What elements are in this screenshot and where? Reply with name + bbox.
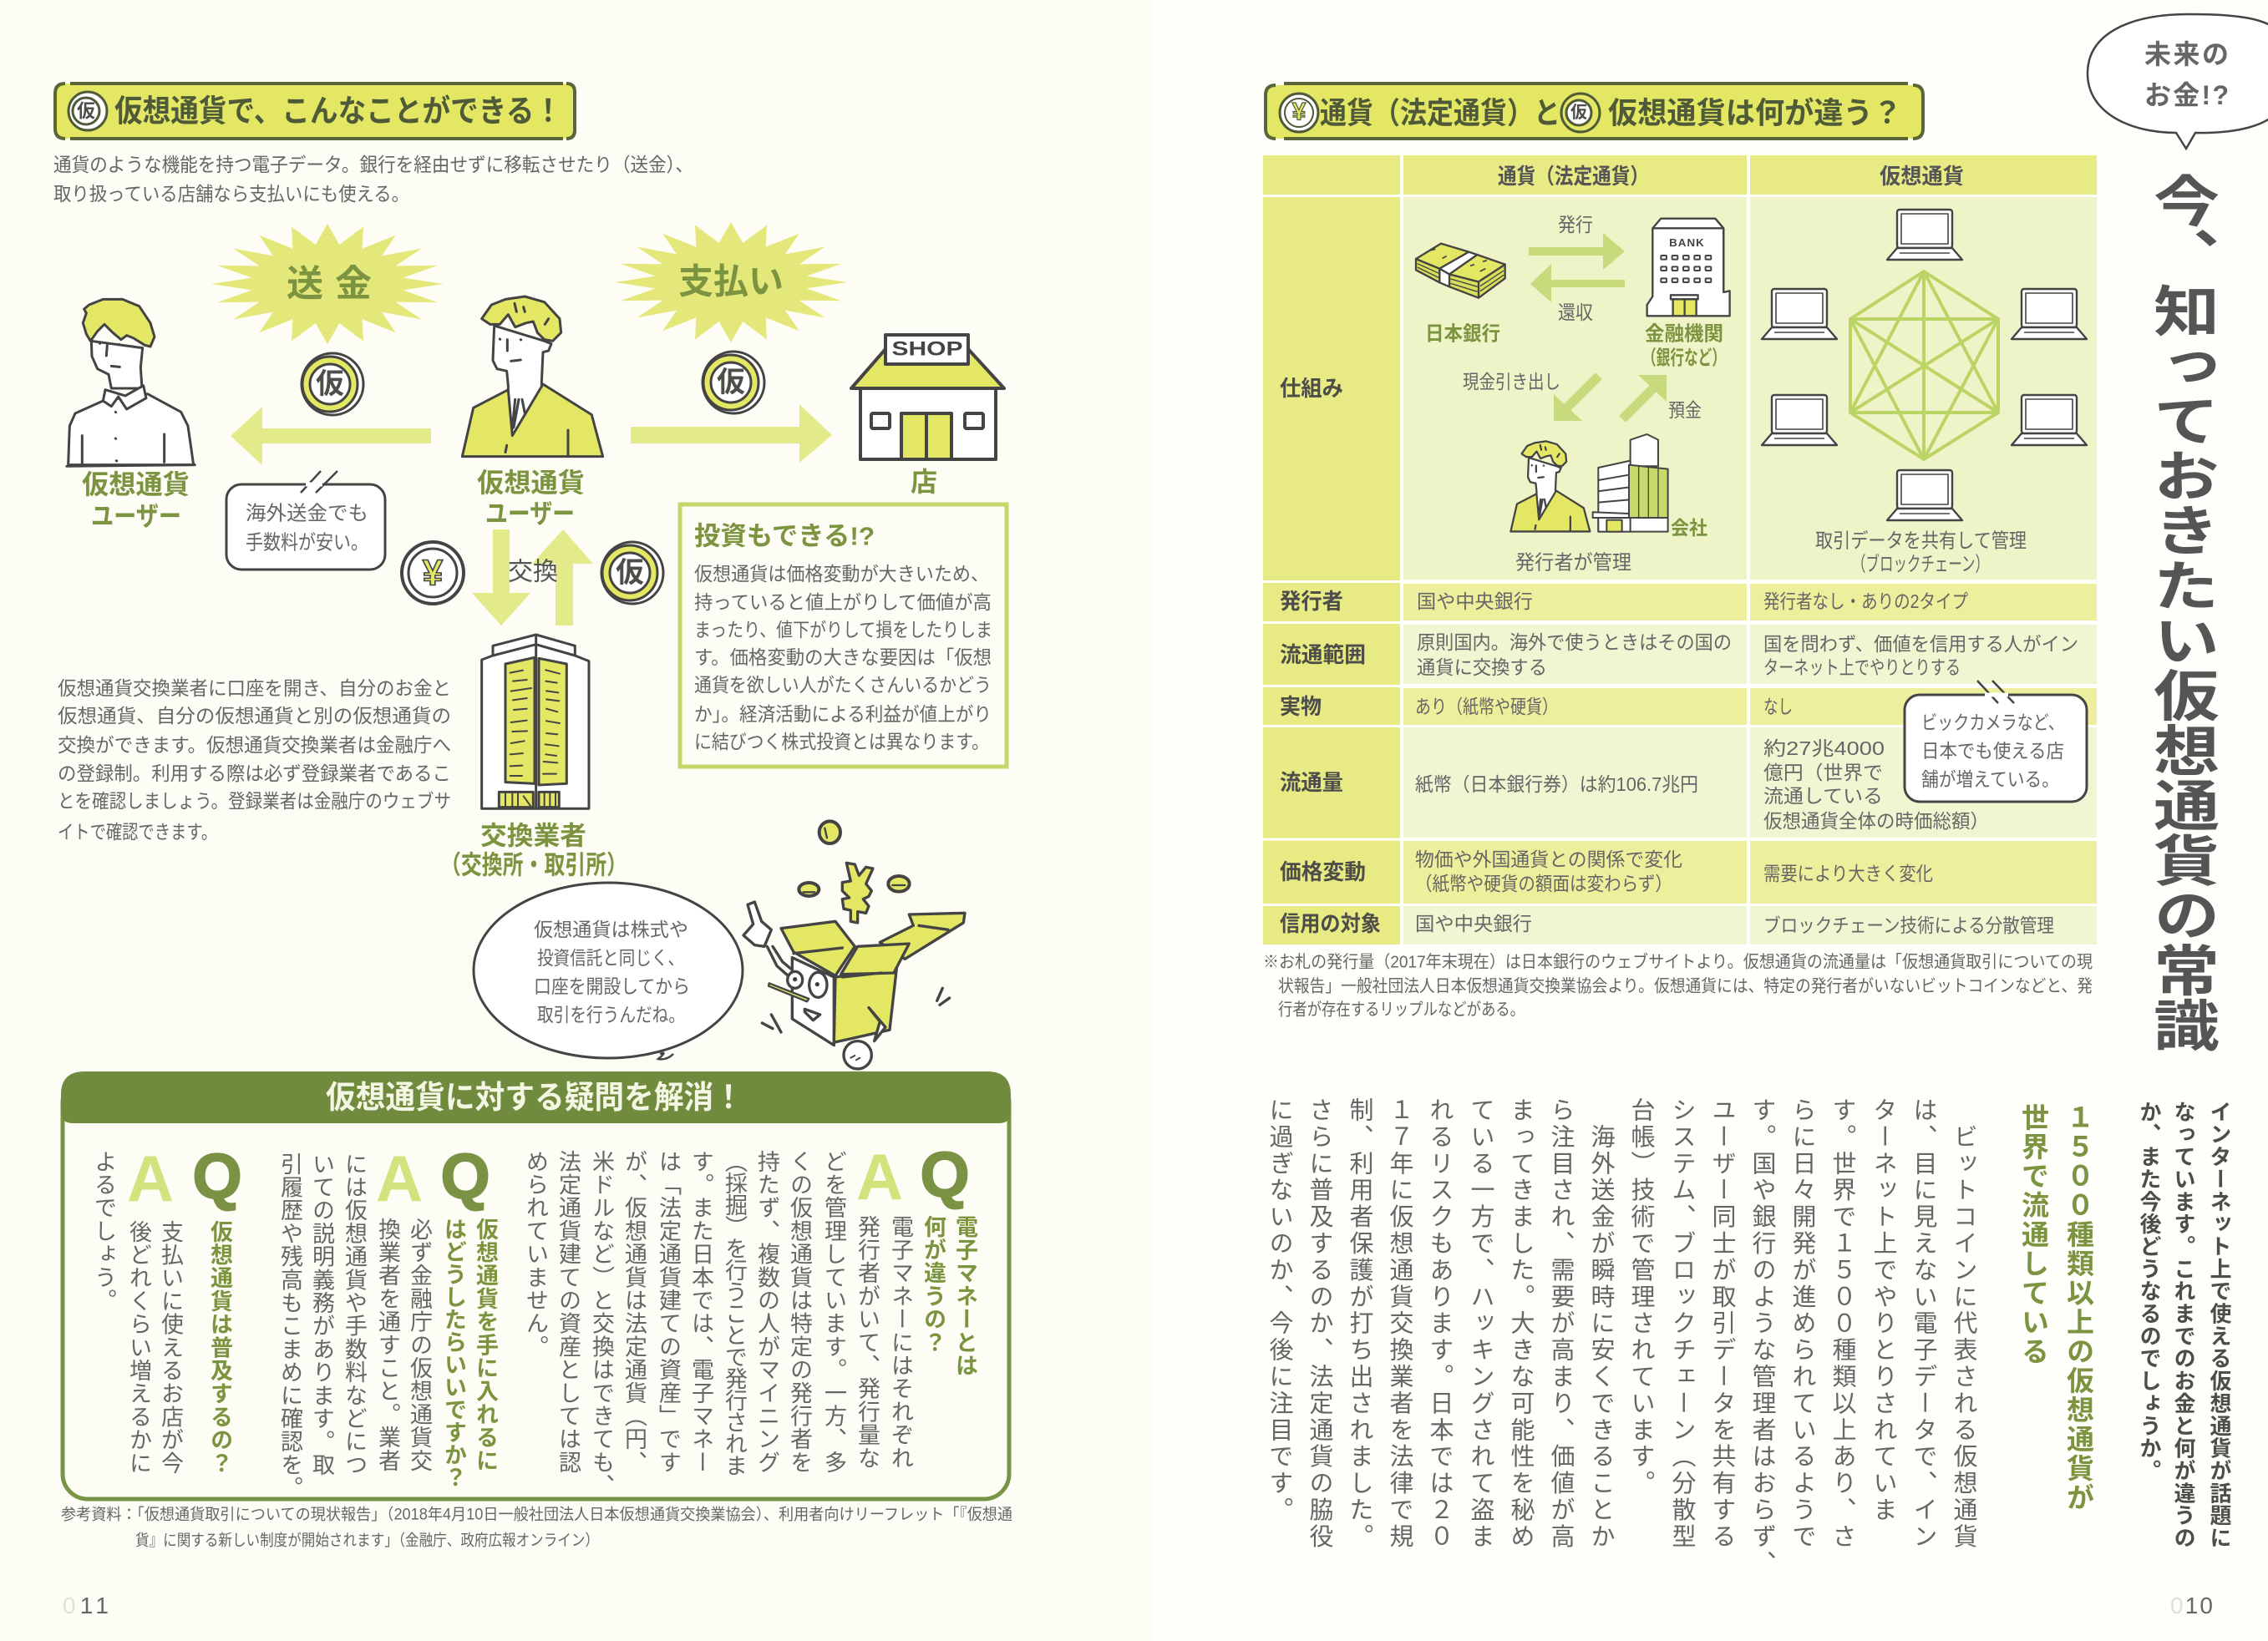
exchange label: 交換業者 <box>480 822 586 850</box>
FAQ 1 <box>523 1139 977 1497</box>
table row labels: 仕組み <box>1280 376 1343 401</box>
right page heading banner: ¥ <box>1292 99 1307 125</box>
investment body: す。価格変動の大きな要因は「仮想 <box>694 646 992 668</box>
FAQ 1: どを管理しています。一方、多 <box>821 1150 847 1474</box>
exchange explanation text: 交換ができます。仮想通貨交換業者は金融庁へ <box>58 734 451 756</box>
FAQ header <box>61 1071 1011 1123</box>
label: shared data: （ブロックチェーン） <box>1852 553 1989 576</box>
icon: bank <box>1647 219 1730 316</box>
exchange explanation text: とを確認しましょう。登録業者は金融庁のウェブサ <box>58 790 451 812</box>
investment body <box>694 563 992 752</box>
FAQ 1: められていません。 <box>523 1150 548 1358</box>
article body: まってきました。大きな可能性を秘め <box>1507 1097 1535 1550</box>
article heading <box>2018 1103 2094 1512</box>
exchange explanation text: イトで確認できます。 <box>58 821 217 843</box>
article heading: 世界で流通している <box>2018 1103 2049 1366</box>
article body: １７年に仮想通貨交換業者を法律で規 <box>1386 1097 1413 1550</box>
FAQ 2: A <box>376 1142 423 1215</box>
icon: money <box>1416 244 1505 298</box>
burst: remittance: 送金 <box>287 264 372 304</box>
icon: coin right: 仮 <box>717 367 745 398</box>
lead text <box>2137 1101 2232 1549</box>
row: price volatility: （紙幣や硬貨の額面は変わらず） <box>1415 873 1672 894</box>
callout: Bic Camera: ビックカメラなど、 <box>1921 712 2064 733</box>
exchange explanation text <box>58 677 451 843</box>
icon: shop <box>851 335 1004 459</box>
table row labels: 発行者 <box>1280 589 1343 614</box>
row: trust: ブロックチェーン技術による分散管理 <box>1763 914 2054 936</box>
arrow: up exchange <box>532 529 593 626</box>
row: price volatility: 物価や外国通貨との関係で変化 <box>1415 848 1682 870</box>
article body: す。世界で１５００種類以上あり、さ <box>1829 1097 1856 1550</box>
exchange label: 交換 <box>508 558 558 586</box>
FAQ 2: Q <box>440 1141 490 1213</box>
investment body: に結びつく株式投資とは異なります。 <box>694 731 989 752</box>
table row labels: 流通量 <box>1280 770 1343 795</box>
right page heading banner: 仮 <box>1570 103 1587 122</box>
main title: 今、知っておきたい仮想通貨の常識 <box>2144 173 2220 1052</box>
investment body: 通貨を欲しい人がたくさんいるかどう <box>694 674 992 696</box>
FAQ 1: くの仮想通貨は特定の発行者を <box>787 1150 812 1474</box>
table footnote: 状報告」一般社団法人日本仮想通貨交換業協会より。仮想通貨には、特定の発行者がいないビットコインなどと、発 <box>1278 977 2093 995</box>
article body: システム、ブロックチェーン（分散型 <box>1668 1097 1696 1550</box>
arrow: deposit <box>1622 375 1667 419</box>
bubble: future money: 未来の <box>2144 39 2229 69</box>
icon: coin left: 仮 <box>316 368 344 400</box>
FAQ 1: 何が違うの？ <box>921 1215 946 1354</box>
right page heading banner <box>1266 84 1923 139</box>
left page heading banner: 仮 <box>77 100 95 122</box>
row: circulation amount: 仮想通貨全体の時価総額） <box>1763 810 1989 832</box>
article body: さらに普及するのか、法定通貨の脇役 <box>1306 1097 1333 1550</box>
FAQ 3: Q <box>192 1141 242 1213</box>
FAQ 1: 発行者がいて、発行量な <box>855 1215 880 1470</box>
investment body: か」。経済活動による利益が値上がり <box>694 703 992 725</box>
icon: yen coin <box>402 542 464 604</box>
mechanism: fiat diagram <box>1416 214 1730 575</box>
table column headers: 通貨（法定通貨） <box>1498 164 1649 189</box>
label: deposit: 預金 <box>1668 399 1702 421</box>
exchange explanation text: 仮想通貨、自分の仮想通貨と別の仮想通貨の <box>58 705 451 727</box>
row: issuer <box>1417 590 1968 612</box>
right page heading banner: 仮想通貨は何が違う？ <box>1608 95 1902 130</box>
speech bubble: 仮想通貨は株式や <box>534 919 688 940</box>
FAQ 3: A <box>127 1142 174 1215</box>
article body: ターネット上でやりとりされていま <box>1870 1097 1896 1523</box>
label: financial institution <box>1642 322 1726 369</box>
lead text: か、また今後どうなるのでしょうか。 <box>2137 1101 2162 1481</box>
row: circulation amount: 億円（世界で <box>1763 762 1883 783</box>
FAQ 1: す。また日本では、電子マネー <box>688 1150 713 1474</box>
row: circulation amount: 紙幣（日本銀行券）は約106.7兆円 <box>1415 773 1698 795</box>
laptops <box>1762 210 2087 520</box>
investment body: 仮想通貨は価格変動が大きいため、 <box>694 563 989 585</box>
label: issuer managed: 発行者が管理 <box>1515 551 1631 575</box>
row: price volatility <box>1415 848 1933 894</box>
row: trust <box>1415 913 2054 936</box>
references: 貨』に関する新しい制度が開始されます」（金融庁、政府広報オンライン） <box>135 1532 599 1550</box>
burst: payment <box>615 222 847 342</box>
article body: 台帳）技術で管理されています。 <box>1627 1097 1656 1497</box>
icon: small person <box>1510 441 1590 531</box>
article body: ている一方で、ハッキングされて盗ま <box>1467 1097 1494 1550</box>
arrow: to user <box>231 407 431 465</box>
table footnote <box>1263 952 2093 1019</box>
icon: bank: BANK <box>1669 236 1704 249</box>
article body <box>1266 1097 1978 1577</box>
FAQ 1: 米ドルなど）と交換はできても、 <box>589 1150 615 1497</box>
article body: らに日々開発が進められているようで <box>1789 1097 1816 1550</box>
label: financial institution: （銀行など） <box>1642 347 1726 369</box>
FAQ 1: 電子マネーとは <box>952 1215 977 1377</box>
left page heading banner <box>55 84 575 139</box>
icon: company building <box>1593 434 1668 532</box>
FAQ 2: 引履歴や残高もこまめに確認を。 <box>277 1152 302 1500</box>
burst: payment: 支払い <box>678 262 784 301</box>
exchange label: （交換所・取引所） <box>440 850 627 880</box>
callout: low fees: 手数料が安い。 <box>246 531 368 555</box>
FAQ 1: は「法定通貨建ての資産」です <box>656 1150 682 1474</box>
row: circulation amount <box>1415 737 1989 832</box>
page background <box>1153 0 2268 1641</box>
callout: Bic Camera: 舗が増えている。 <box>1921 768 2059 790</box>
row: circulation range: ターネット上でやりとりする <box>1763 656 1961 678</box>
FAQ 3: 仮想通貨は普及するの？ <box>207 1220 232 1475</box>
panel: FAQ <box>61 1071 1011 1500</box>
row: circulation range: 通貨に交換する <box>1417 656 1547 678</box>
icon: box character <box>743 821 965 1069</box>
arrow: issue <box>1529 233 1625 270</box>
references <box>61 1505 1012 1550</box>
panel: investment note <box>680 504 1007 767</box>
article body: ビットコインに代表される仮想通貨 <box>1950 1097 1978 1550</box>
table column headers: 仮想通貨 <box>1880 164 1964 189</box>
icon: coin left <box>302 353 363 415</box>
icon: yen coin: ¥ <box>423 553 444 593</box>
investment body: 持っていると値上がりして価値が高 <box>694 591 992 613</box>
callout: Bic Camera: 日本でも使える店 <box>1921 740 2064 762</box>
FAQ title: 仮想通貨に対する疑問を解消！ <box>326 1081 743 1116</box>
article heading: １５００種類以上の仮想通貨が <box>2063 1103 2094 1512</box>
comparison table <box>1263 155 2097 945</box>
investment body: まったり、値下がりして損をしたりしま <box>694 619 992 641</box>
speech bubble: 投資信託と同じく、 <box>537 947 684 969</box>
exchange label <box>440 822 627 880</box>
mechanism: blockchain diagram <box>1762 210 2087 576</box>
arrow: return <box>1530 264 1625 302</box>
row: circulation range: 国を問わず、価値を信用する人がイン <box>1763 633 2078 655</box>
speech bubble: 口座を開設してから <box>534 975 690 997</box>
icon: coin exchange: 仮 <box>616 557 644 589</box>
article body: 制、利用者保護が打ち出されました。 <box>1346 1097 1373 1550</box>
callout: low fees <box>226 471 385 570</box>
article body: ら注目され、需要が高まり、価値が高 <box>1547 1097 1575 1550</box>
FAQ 2: 換業者を通すこと。業者 <box>375 1218 401 1472</box>
bubble: future money <box>2088 14 2268 149</box>
table footnote: 行者が存在するリップルなどがある。 <box>1278 1000 1525 1019</box>
FAQ 1: が、仮想通貨は法定通貨（円、 <box>622 1150 647 1474</box>
table row labels: 信用の対象 <box>1280 911 1381 936</box>
left user label <box>82 469 190 531</box>
FAQ 3: 支払いに使えるお店が今 <box>158 1220 184 1475</box>
burst: remittance <box>211 224 444 344</box>
row: trust: 国や中央銀行 <box>1415 913 1532 934</box>
FAQ 3 <box>91 1141 242 1475</box>
label: financial institution: 金融機関 <box>1645 322 1723 346</box>
intro text: 通貨のような機能を持つ電子データ。銀行を経由せずに移転させたり（送金）、 <box>53 154 693 175</box>
FAQ 2: 必ず金融庁の仮想通貨交 <box>407 1218 433 1472</box>
FAQ 1: （採掘）を行うことで発行されま <box>722 1150 747 1476</box>
row: price volatility: 需要により大きく変化 <box>1763 863 1933 884</box>
label: shared data <box>1815 529 2027 576</box>
label: return: 還収 <box>1558 301 1593 323</box>
FAQ 1: 持たず、複数の人がマイニング <box>754 1150 780 1474</box>
left user label: 仮想通貨 <box>82 469 190 499</box>
callout: Bic Camera <box>1905 681 2087 802</box>
table backgrounds <box>1263 155 2097 945</box>
page number right: 010 <box>2170 1592 2213 1618</box>
FAQ 2: はどうしたらいいですか？ <box>441 1218 466 1488</box>
label: withdrawal: 現金引き出し <box>1463 371 1560 393</box>
FAQ 3: 後どれくらい増えるかに <box>126 1220 152 1475</box>
arrow: down exchange <box>472 529 530 626</box>
investment heading: 投資もできる!? <box>694 521 875 551</box>
table row labels: 流通範囲 <box>1280 642 1366 667</box>
center user label: 仮想通貨 <box>477 468 585 498</box>
row: circulation range <box>1417 631 2078 678</box>
article body: す。国や銀行のような管理者はおらず、 <box>1748 1097 1776 1577</box>
icon: exchange building <box>482 635 589 808</box>
article body: に過ぎないのか、今後に注目です。 <box>1266 1097 1293 1523</box>
FAQ 2: 仮想通貨を手に入れるに <box>473 1218 498 1472</box>
row: physical <box>1415 696 1793 717</box>
icon: left user <box>67 299 195 466</box>
intro text <box>53 154 693 205</box>
row: circulation range: 原則国内。海外で使うときはその国の <box>1417 631 1732 653</box>
lead text: なっています。これまでのお金と何が違うの <box>2171 1101 2196 1549</box>
lead text: インターネット上で使える仮想通貨が話題に <box>2207 1101 2232 1549</box>
table column headers <box>1498 164 1964 189</box>
FAQ 1: Q <box>920 1139 970 1211</box>
intro text: 取り扱っている店舗なら支払いにも使える。 <box>53 183 409 205</box>
arrow: withdrawal <box>1554 376 1599 421</box>
article body: 海外送金が瞬時に安くできることか <box>1587 1097 1616 1550</box>
row: issuer: 国や中央銀行 <box>1417 590 1533 612</box>
row: circulation amount: 流通している <box>1763 785 1883 807</box>
label: issue: 発行 <box>1558 214 1593 236</box>
table footnote: ※お札の発行量（2017年末現在）は日本銀行のウェブサイトより。仮想通貨の流通量は「仮想通貨取引についての現 <box>1263 952 2093 972</box>
FAQ 1: 電子マネーにはそれぞれ <box>888 1215 913 1470</box>
table row labels <box>1280 376 1381 936</box>
center user label <box>477 468 585 529</box>
FAQ 1: 法定通貨建ての資産としては認 <box>556 1150 581 1474</box>
row: circulation amount: 約27兆4000 <box>1763 737 1885 759</box>
bubble: future money: お金!? <box>2144 80 2229 110</box>
right page heading banner: 通貨（法定通貨）と <box>1320 95 1560 130</box>
FAQ 2 <box>277 1141 498 1500</box>
shop label: 店 <box>911 467 937 497</box>
FAQ 3: よるでしょう。 <box>91 1150 116 1312</box>
FAQ frame <box>63 1077 1009 1499</box>
speech bubble: 取引を行うんだね。 <box>537 1004 685 1026</box>
exchange explanation text: の登録制。利用する際は必ず登録業者であるこ <box>58 762 451 784</box>
left page heading banner: 仮想通貨で、こんなことができる！ <box>114 94 562 129</box>
icon: shop: SHOP <box>892 337 962 361</box>
label: shared data: 取引データを共有して管理 <box>1815 529 2027 553</box>
exchange explanation text: 仮想通貨交換業者に口座を開き、自分のお金と <box>58 677 451 699</box>
FAQ 2: には仮想通貨や手数料などにつ <box>342 1152 368 1476</box>
left user label: ユーザー <box>91 501 181 531</box>
references: 参考資料：「仮想通貨取引についての現状報告」（2018年4月10日一般社団法人日本仮想通貨交換業協会）、利用者向けリーフレット「『仮想通 <box>61 1505 1012 1523</box>
page number left: 011 <box>63 1592 109 1618</box>
table row labels: 実物 <box>1280 694 1322 719</box>
FAQ 2: いての説明義務があります。取 <box>309 1152 334 1476</box>
icon: center user <box>462 296 603 457</box>
article body: ユーザー同士が取引データを共有する <box>1708 1097 1736 1550</box>
callout: low fees: 海外送金でも <box>246 503 368 524</box>
row: physical: あり（紙幣や硬貨） <box>1415 696 1558 717</box>
center user label: ユーザー <box>485 499 575 529</box>
row: physical: なし <box>1763 696 1793 717</box>
icon: coin exchange <box>601 542 663 604</box>
network lines <box>1850 271 1998 459</box>
table row labels: 価格変動 <box>1280 859 1366 884</box>
article body: は、目に見えない電子データで、イン <box>1910 1097 1936 1550</box>
row: issuer: 発行者なし・ありの2タイプ <box>1763 590 1968 612</box>
FAQ 1: A <box>856 1140 903 1213</box>
label: company: 会社 <box>1671 517 1707 539</box>
speech bubble <box>474 883 743 1059</box>
label: Bank of Japan: 日本銀行 <box>1425 322 1500 346</box>
article body: れるリスクもあります。日本では２０ <box>1426 1097 1454 1550</box>
icon: coin right <box>703 352 764 413</box>
arrow: to shop <box>631 404 832 463</box>
